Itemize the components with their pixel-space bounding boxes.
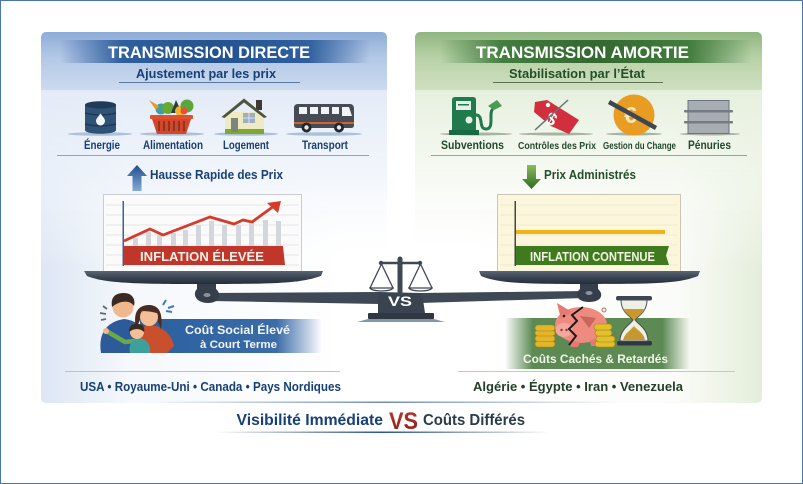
chart: inflation contenue (498, 194, 680, 272)
beam (210, 291, 585, 304)
vs label: VS (388, 293, 412, 309)
icon: coins right (594, 324, 615, 347)
callout: coûts cachés et retardés (505, 296, 690, 369)
left tray (84, 271, 323, 284)
subheading: ajustement par les prix: Ajustement par les prix (136, 66, 277, 81)
conclusion: Coûts Différés (423, 412, 525, 429)
small right pan (409, 264, 432, 291)
text: pays: Algérie • Égypte • Iran • Venezuela (473, 379, 684, 394)
text: hausse rapide des prix: Hausse Rapide des Prix (150, 167, 284, 182)
icon: broken piggy bank (555, 303, 607, 347)
icon: house (214, 98, 278, 136)
text: prix administrés: Prix Administrés (544, 167, 636, 182)
label: subventions: Subventions (441, 140, 504, 152)
callout: coût social élevé: à Court Terme (200, 339, 277, 351)
heading: transmission directe (60, 40, 370, 63)
balance scale (84, 256, 700, 322)
arrow: down (522, 165, 541, 189)
label: contrôles des prix: Contrôles des Prix (518, 140, 596, 152)
small left pan (370, 264, 393, 291)
icon: coins left (535, 325, 555, 347)
label: gestion du change: Gestion du Change (603, 140, 676, 152)
heading: transmission amortie (440, 40, 752, 63)
label: pénuries: Pénuries (688, 140, 731, 152)
icon: fuel pump (440, 97, 512, 136)
icon: empty shelves (680, 100, 740, 136)
conclusion: Visibilité Immédiate (236, 412, 383, 429)
panel: transmission directe (41, 32, 387, 394)
right pivot (577, 284, 601, 302)
central stand (357, 256, 445, 322)
icon: oil barrel (68, 101, 132, 136)
icon: crossed price tag: $ (542, 108, 561, 130)
callout: coût social élevé (100, 293, 322, 353)
text: pays: USA • Royaume-Uni • Canada • Pays Nordiques (80, 379, 341, 394)
chart: inflation élevée (104, 194, 302, 272)
label: alimentation: Alimentation (143, 140, 203, 152)
icon: crossed euro coin (606, 94, 662, 136)
label: logement: Logement (223, 140, 269, 152)
chart: inflation contenue: INFLATION CONTENUE (530, 250, 655, 264)
left pivot (195, 284, 219, 303)
icon: hourglass (616, 296, 652, 346)
icon: family (100, 293, 174, 353)
arrow: up (127, 165, 147, 191)
label: transport: Transport (302, 140, 348, 152)
heading: transmission directe: TRANSMISSION DIRECTE (108, 44, 310, 62)
subheading: stabilisation par l'état: Stabilisation par l’État (509, 66, 646, 81)
label: énergie: Énergie (84, 139, 120, 152)
icon: food basket (140, 100, 204, 136)
icon: bus (286, 104, 362, 136)
conclusion: VS (389, 408, 418, 435)
panel: transmission amortie (415, 32, 762, 394)
chart: inflation élevée: INFLATION ÉLEVÉE (140, 249, 264, 264)
icon: crossed euro coin: € (624, 102, 637, 128)
callout: coût social élevé: Coût Social Élevé (185, 322, 290, 337)
heading: transmission amortie: TRANSMISSION AMORTIE (476, 44, 689, 62)
callout: coûts cachés et retardés: Coûts Cachés & Retardés (523, 352, 668, 366)
right tray (479, 271, 700, 284)
icon: crossed price tag (519, 100, 593, 136)
conclusion (216, 408, 550, 435)
